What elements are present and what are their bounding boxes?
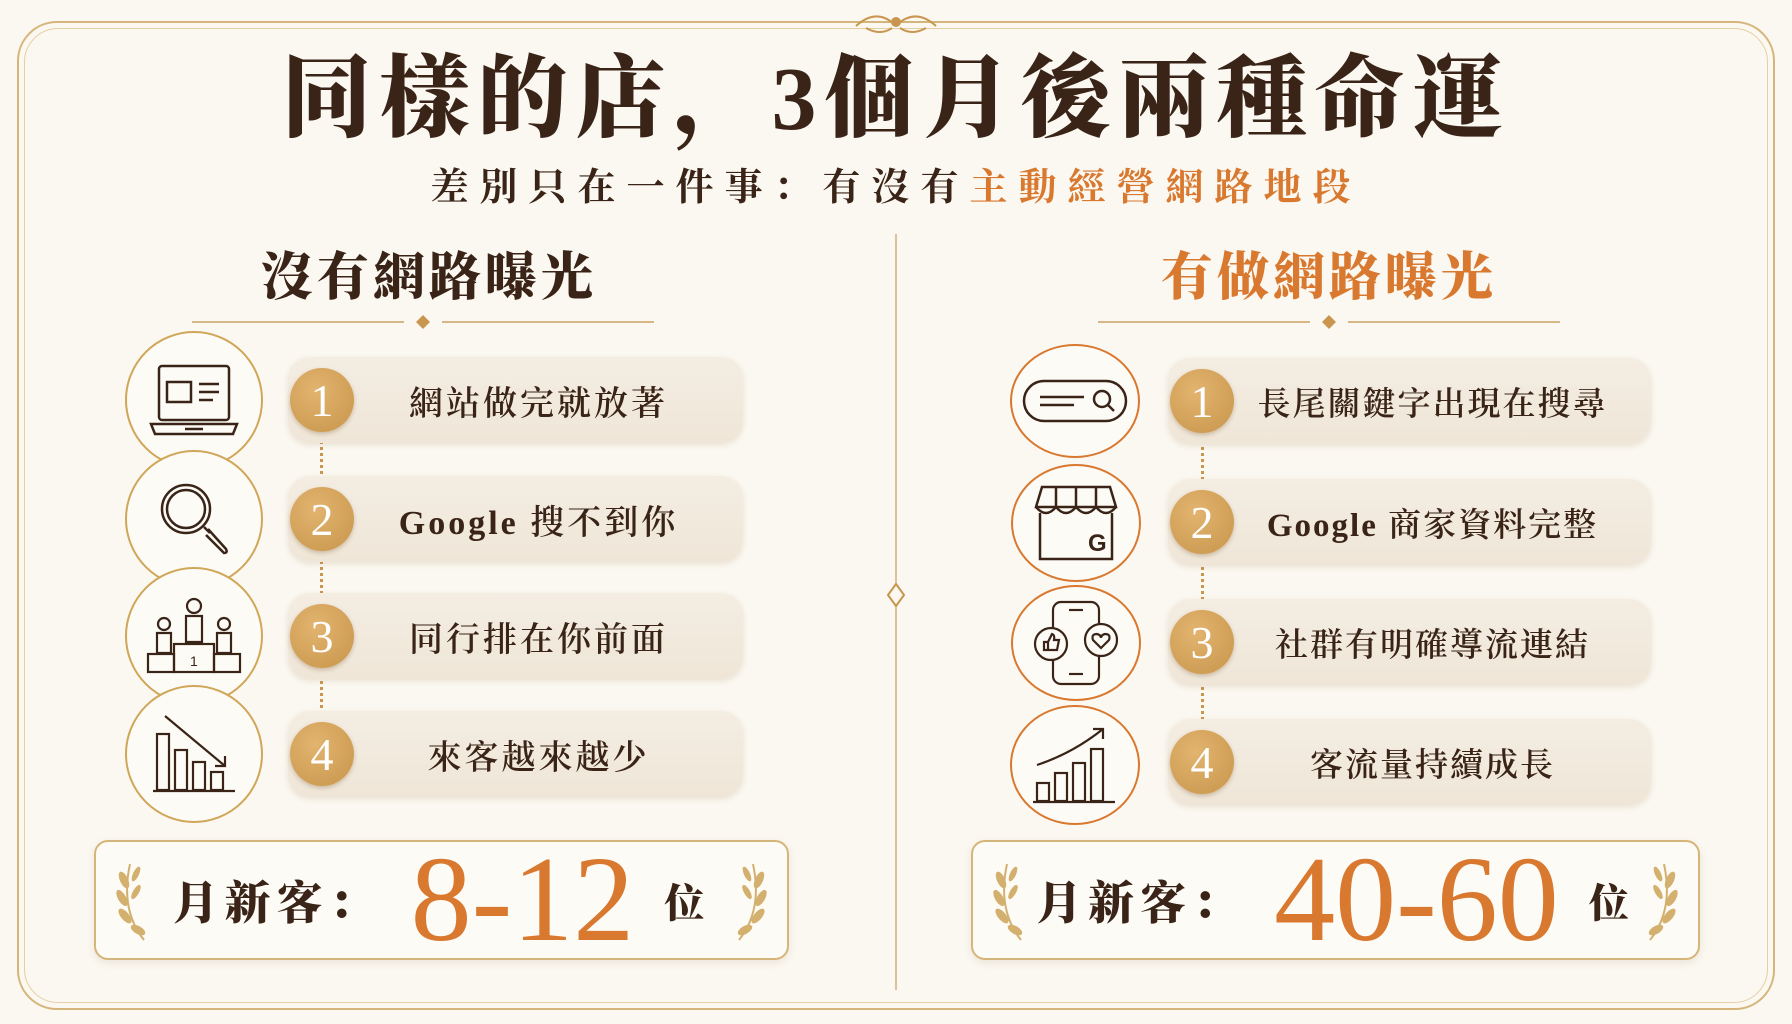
pill 1 right: 長尾關鍵字出現在搜尋	[1258, 386, 1608, 422]
icon: store with G	[1011, 464, 1141, 582]
pill 4 right: 4	[1190, 736, 1214, 788]
left underline	[192, 315, 654, 329]
laurel right	[1648, 864, 1678, 941]
pill 3 right: 社群有明確導流連結	[1275, 628, 1590, 664]
result box right	[971, 840, 1700, 960]
icon: declining chart	[125, 685, 263, 823]
divider diamond	[887, 583, 905, 607]
pill 1 left: 網站做完就放著	[409, 386, 668, 422]
title: 同樣的店，3個月後兩種命運	[282, 50, 1510, 149]
result box left: 位	[664, 880, 710, 926]
pill 1 right: 1	[1190, 376, 1214, 426]
pill 4 left	[288, 711, 743, 797]
right connector dots	[1201, 440, 1204, 740]
left heading: 沒有網路曝光	[261, 250, 597, 307]
pill 3 left: 同行排在你前面	[409, 622, 668, 658]
right underline	[1098, 315, 1560, 329]
pill 3 right: 3	[1190, 616, 1214, 668]
laurel left	[993, 864, 1022, 941]
icon: growth chart	[1010, 705, 1140, 825]
pill 3 left	[288, 593, 743, 679]
pill 4 right	[1168, 719, 1651, 805]
icon: search bar	[1010, 344, 1140, 458]
pill 2 left: 2	[310, 494, 334, 544]
left connector dots	[320, 440, 323, 740]
center divider	[895, 234, 897, 990]
pill 1 left	[288, 357, 743, 443]
result box left: 月新客：	[173, 878, 381, 929]
pill 2 right: Google 商家資料完整	[1267, 508, 1598, 544]
pill 2 right	[1168, 479, 1651, 565]
result box right: 月新客：	[1036, 878, 1244, 929]
pill 3 right	[1168, 599, 1651, 685]
pill 2 left	[288, 476, 743, 562]
pill 1 left: 1	[310, 374, 334, 426]
result box right: 位	[1589, 880, 1635, 926]
result box right: 40-60	[1274, 832, 1559, 967]
pill 4 left: 4	[310, 728, 334, 780]
icon: phone social	[1011, 585, 1141, 701]
result box left: 8-12	[411, 832, 634, 967]
laurel right	[738, 864, 767, 941]
icon: podium	[125, 567, 263, 705]
pill 1 right	[1168, 358, 1651, 444]
pill 2 right: 2	[1190, 496, 1214, 548]
subtitle: 差別只在一件事：有沒有主動經營網路地段	[430, 167, 1362, 209]
right heading: 有做網路曝光	[1161, 250, 1497, 307]
icon: laptop	[125, 331, 263, 469]
pill 4 left: 來客越來越少	[428, 740, 650, 776]
icon: podium: 1	[190, 653, 198, 669]
icon: magnifier	[125, 450, 263, 588]
laurel left	[116, 864, 146, 941]
result box left	[94, 840, 789, 960]
icon: store with G: G	[1088, 530, 1107, 557]
pill 3 left: 3	[310, 610, 334, 662]
top ornament	[855, 15, 937, 33]
pill 4 right: 客流量持續成長	[1310, 748, 1555, 784]
pill 2 left: Google 搜不到你	[399, 504, 678, 542]
